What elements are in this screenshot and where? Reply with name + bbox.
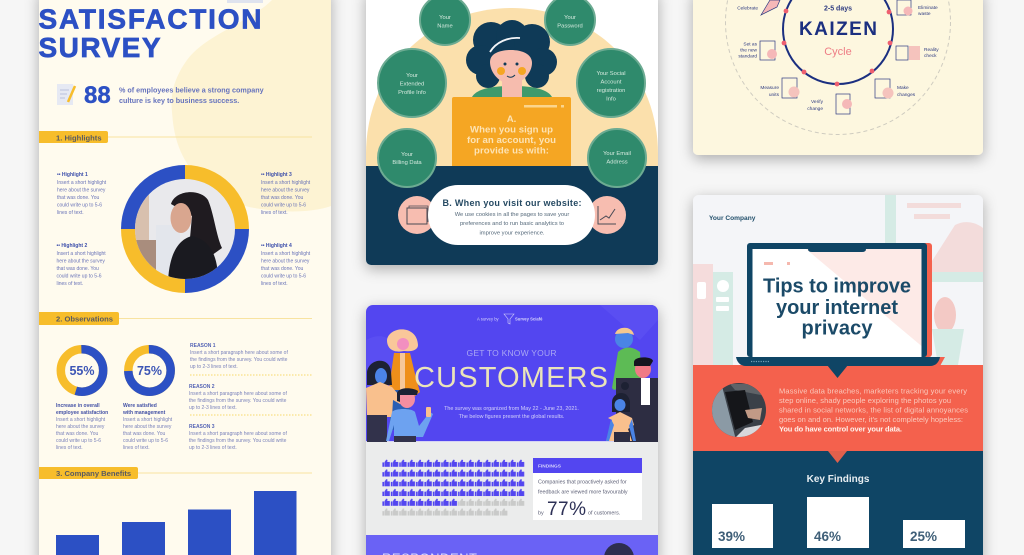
kaizen title: 2-5 days — [824, 6, 852, 12]
highlight 1 — [57, 172, 107, 216]
title: SATISFACTION — [38, 4, 262, 34]
circle: billing data — [378, 129, 436, 187]
reasons list: Insert a short paragraph here about some of — [189, 391, 287, 397]
laptop title: privacy — [802, 318, 873, 340]
findings box: feedback are viewed more favourably — [538, 490, 628, 496]
panel: kaizen cycle — [693, 0, 983, 155]
step: make changes: changes — [897, 92, 916, 98]
highlight 3: here about the survey — [261, 188, 310, 194]
highlight 4: •• Highlight 4 — [261, 243, 292, 249]
reasons list: REASON 2 — [189, 384, 215, 390]
step: measure units — [760, 78, 800, 98]
step: make changes — [875, 79, 916, 98]
highlight 1: here about the survey — [57, 188, 106, 194]
reasons list: the findings from the survey. You could write — [189, 438, 287, 444]
donut: 55 percent — [61, 349, 103, 392]
highlight 3: Insert a short highlight — [261, 180, 311, 186]
stat bar: 25 percent — [903, 520, 965, 548]
heading: highlights — [39, 131, 312, 143]
laptop title: your internet — [776, 297, 898, 319]
company name: Your Company — [709, 215, 756, 222]
survey byline: Survey Sciafé — [515, 316, 543, 322]
laptop box: section A — [452, 97, 571, 166]
reasons list — [189, 343, 312, 451]
caption: satisfaction: lines of text. — [56, 445, 83, 451]
step: set as new standard: the new — [740, 48, 758, 54]
circle: your name — [420, 0, 470, 45]
highlight 3: that was done. You — [261, 195, 303, 201]
highlight 2: •• Highlight 2 — [56, 243, 87, 249]
highlight 1: lines of text. — [57, 210, 84, 216]
cycle rings — [726, 0, 950, 134]
step: reality check — [896, 46, 939, 60]
caption: management — [122, 403, 173, 451]
step: celebrate: Celebrate — [737, 6, 758, 12]
heading: key findings: Key Findings — [807, 474, 870, 485]
circle: your password: Password — [557, 24, 583, 30]
step: reality check: Reality — [924, 47, 939, 53]
step: verify change: Verify — [811, 99, 824, 105]
highlight 2 — [56, 243, 106, 287]
donut: 75 percent — [128, 349, 171, 392]
step: celebrate — [737, 0, 780, 15]
caption: satisfaction: employee satisfaction — [56, 410, 108, 416]
heading: company benefits — [39, 467, 312, 479]
reasons list: up to 2-3 lines of text. — [189, 405, 237, 411]
intro paragraph: step online, shady people exploring the photos you — [779, 396, 951, 405]
caption: management: Were satisfied — [123, 403, 157, 409]
circle: extended profile: Your — [406, 73, 418, 79]
pill: section B — [428, 185, 595, 245]
highlight 4: lines of text. — [261, 281, 288, 287]
heading: observations: 2. Observations — [56, 314, 113, 324]
step: set as new standard: Set as — [743, 42, 758, 48]
pointer arrow: intro to findings — [828, 451, 847, 463]
thumbs up pictogram: 77 percent — [382, 459, 525, 518]
caption: satisfaction: that was done. You — [56, 431, 98, 437]
reasons list: the findings from the survey. You could write — [189, 398, 287, 404]
reasons list: Insert a short paragraph here about some of — [189, 431, 287, 437]
donut with photo of smiling woman — [121, 165, 249, 293]
highlight 1: •• Highlight 1 — [57, 172, 88, 178]
step: eliminate waste: waste — [918, 11, 931, 17]
circle: social account: Account — [601, 80, 622, 86]
caption: management: could write up to 5-6 — [123, 438, 168, 444]
stat bar: 46 percent: 46% — [814, 529, 841, 544]
highlight 2: lines of text. — [56, 281, 83, 287]
survey byline — [477, 314, 543, 324]
icon: line graph — [588, 196, 626, 234]
stat bar: 46 percent — [807, 497, 869, 548]
circle: social account: Your Social — [596, 71, 626, 77]
laptop — [736, 243, 945, 366]
caption: satisfaction: here about the survey — [56, 424, 105, 430]
highlight 3: could write up to 5-6 — [261, 202, 306, 208]
highlight 4 — [261, 243, 311, 287]
caption: satisfaction: Insert a short highlight — [56, 417, 106, 423]
circle: billing data: Billing Data — [392, 160, 422, 166]
stat bar: 25 percent: 25% — [910, 529, 937, 544]
kaizen title — [799, 6, 877, 58]
statistic: 88 percent — [84, 82, 264, 109]
illustration: woman with curly hair — [466, 20, 557, 98]
laptop box: section A: provide us with: — [474, 146, 549, 156]
heading: highlights: 1. Highlights — [56, 134, 102, 142]
heading: observations — [39, 312, 312, 325]
step: measure units: units — [769, 92, 780, 98]
kaizen title: KAIZEN — [799, 19, 877, 40]
panel: privacy policy — [366, 0, 658, 266]
stat bar: 39 percent — [712, 504, 773, 548]
intro paragraph: goes on and on. However, it's not completely hopeless: — [779, 415, 963, 424]
heading: customers: CUSTOMERS — [414, 362, 608, 394]
intro paragraph: shared in social networks, the list of digital annoyances — [779, 406, 968, 414]
intro paragraph: Massive data breaches, marketers tracking your every — [779, 386, 967, 396]
highlight 2: that was done. You — [56, 266, 99, 272]
highlight 1: that was done. You — [57, 195, 99, 201]
circle: social account: registration — [597, 88, 625, 94]
illustration: customers left group — [366, 329, 433, 442]
pill: section B: B. When you visit our website: — [442, 198, 582, 208]
step: verify change — [807, 94, 852, 114]
reasons list: up to 2-3 lines of text. — [189, 445, 237, 451]
highlight 2: could write up to 5-6 — [56, 274, 102, 280]
highlight 4: could write up to 5-6 — [261, 274, 306, 280]
survey dates: The below figures present the global results. — [459, 414, 564, 420]
highlight 4: that was done. You — [261, 266, 303, 272]
highlight 3 — [261, 172, 311, 216]
caption: management: lines of text. — [123, 445, 150, 451]
survey dates: The survey was organized from May 22 - June 23, 2021. — [444, 406, 579, 412]
reasons list: the findings from the survey. You could write — [190, 357, 288, 363]
circle: your password: Your — [564, 15, 576, 21]
step: set as new standard — [738, 41, 777, 60]
statistic: 88 percent: culture is key to business success. — [119, 96, 239, 105]
reasons list: REASON 3 — [189, 424, 215, 430]
panel: get to know your customers — [366, 305, 658, 555]
stat bar: 39 percent: 39% — [718, 529, 745, 544]
panel: internet privacy tips — [693, 195, 983, 555]
circle: email address — [588, 129, 646, 187]
step: reality check: check — [924, 53, 937, 59]
findings box: Companies that proactively asked for — [538, 480, 627, 486]
step: eliminate waste: Eliminate — [918, 5, 938, 11]
statistic: 88 percent: % of employees believe a strong company — [119, 86, 264, 94]
circle: extended profile: Extended — [400, 82, 424, 88]
step: measure units: Measure — [760, 85, 779, 91]
intro paragraph: You do have control over your data. — [779, 424, 902, 434]
laptop title: Tips to improve — [763, 276, 911, 298]
circle: billing data: Your — [401, 152, 413, 158]
heading: get to know your: GET TO KNOW YOUR — [466, 348, 556, 358]
highlight 3: lines of text. — [261, 210, 288, 216]
title: SURVEY — [38, 32, 161, 63]
icon: browser window — [398, 196, 436, 234]
caption: satisfaction — [56, 403, 108, 451]
pill: section B: improve your experience. — [479, 230, 545, 236]
highlight 4: Insert a short highlight — [261, 251, 311, 257]
illustration: customers right group — [606, 328, 658, 442]
circle: your password — [545, 0, 595, 45]
findings box — [533, 458, 642, 520]
statistic: 88 percent: 88 — [84, 82, 111, 109]
donut: 75 percent: 75% — [137, 364, 162, 378]
pointer arrow: laptop to intro — [827, 365, 848, 378]
caption: satisfaction: could write up to 5-6 — [56, 438, 101, 444]
reasons list: REASON 1 — [190, 343, 216, 349]
highlight 2: here about the survey — [56, 258, 105, 264]
caption: satisfaction: Increase in overall — [56, 403, 100, 409]
highlight 1: could write up to 5-6 — [57, 202, 102, 208]
photo: hand holding phone — [712, 383, 766, 440]
highlight 3: •• Highlight 3 — [261, 172, 292, 178]
icon: document with pencil — [57, 84, 75, 105]
circle: email address: Address — [606, 160, 628, 166]
findings box: by — [538, 510, 544, 516]
findings box: of customers. — [588, 510, 620, 516]
cycle nodes — [782, 9, 892, 86]
step: eliminate waste — [897, 0, 938, 17]
caption: management: that was done. You — [123, 431, 165, 437]
laptop box: section A: When you sign up — [470, 124, 553, 136]
circle: your name: Your — [439, 15, 451, 21]
panel: satisfaction survey — [38, 0, 331, 555]
laptop box: section A: A. — [507, 114, 516, 125]
step: set as new standard: standard — [738, 54, 757, 60]
step: make changes: Make — [897, 85, 909, 91]
circle: social account — [577, 49, 645, 117]
heading: company benefits: 3. Company Benefits — [56, 469, 131, 478]
survey byline: A survey by — [477, 316, 500, 322]
circle: extended profile: Profile Info — [398, 90, 426, 96]
reasons list: up to 2-3 lines of text. — [190, 364, 238, 370]
laptop box: section A: for an account, you — [467, 135, 556, 146]
title — [38, 4, 262, 63]
caption: management: with management — [122, 410, 166, 416]
highlight 2: Insert a short highlight — [56, 251, 106, 257]
caption: management: here about the survey — [123, 424, 172, 430]
highlight 4: here about the survey — [261, 258, 310, 264]
circle: social account: Info — [606, 96, 616, 102]
kaizen title: Cycle — [824, 46, 852, 58]
bar chart — [56, 491, 296, 555]
reasons list: Insert a short paragraph here about some of — [190, 350, 288, 356]
findings box: FINDINGS — [538, 464, 562, 470]
circle: email address: Your Email — [603, 151, 631, 157]
circle: extended profile — [378, 49, 446, 117]
step: verify change: change — [807, 106, 823, 112]
circle: your name: Name — [437, 24, 453, 30]
decorative room background — [693, 195, 983, 365]
findings box: 77% — [547, 499, 586, 520]
pill: section B: preferences and to run basic analytics to — [460, 221, 564, 227]
respondent profile section — [382, 543, 634, 555]
caption: management: Insert a short highlight — [123, 417, 173, 423]
highlight 1: Insert a short highlight — [57, 180, 107, 186]
donut: 55 percent: 55% — [69, 364, 95, 378]
pill: section B: We use cookies in all the pages to save your — [455, 212, 569, 218]
